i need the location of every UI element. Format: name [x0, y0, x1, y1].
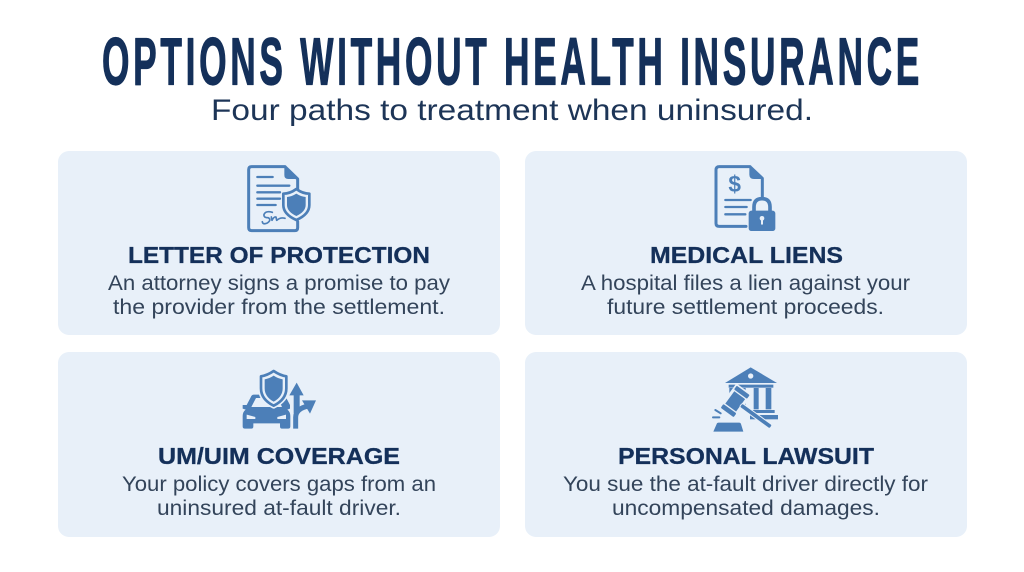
- description: Your policy covers gaps from an: [122, 472, 436, 496]
- icon: signed document with shield: [249, 167, 309, 231]
- icon: invoice with padlock: [716, 167, 775, 231]
- panel: letter of protection: [58, 151, 500, 335]
- heading: LETTER OF PROTECTION: [128, 242, 430, 268]
- description: future settlement proceeds.: [607, 295, 884, 319]
- description: [108, 271, 450, 319]
- icon: invoice with padlock: $: [728, 171, 741, 197]
- description: [581, 271, 910, 319]
- panel: personal lawsuit: [525, 352, 967, 537]
- description: [122, 472, 436, 520]
- panel: medical liens: [525, 151, 967, 335]
- description: You sue the at-fault driver directly for: [563, 472, 928, 496]
- description: An attorney signs a promise to pay: [108, 271, 450, 295]
- subtitle: Four paths to treatment when uninsured.: [211, 94, 813, 127]
- description: [563, 472, 928, 520]
- description: uninsured at-fault driver.: [157, 496, 401, 520]
- panel: um/uim coverage: [58, 352, 500, 537]
- description: the provider from the settlement.: [113, 295, 445, 319]
- description: A hospital files a lien against your: [581, 271, 910, 295]
- description: uncompensated damages.: [612, 496, 880, 520]
- heading: UM/UIM COVERAGE: [158, 443, 400, 469]
- icon: car with shield and arrows: [243, 370, 316, 429]
- heading: MEDICAL LIENS: [650, 242, 843, 268]
- heading: PERSONAL LAWSUIT: [618, 443, 875, 469]
- icon: courthouse and gavel: [713, 367, 780, 440]
